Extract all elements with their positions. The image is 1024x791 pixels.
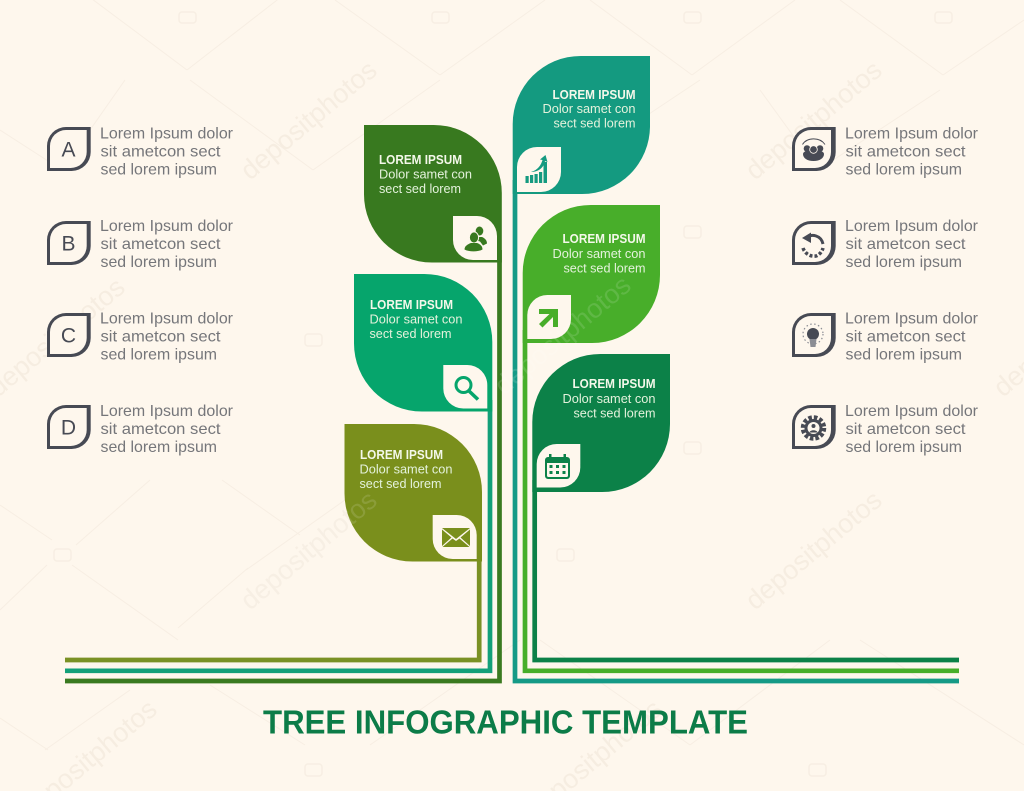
icon: team — [802, 139, 825, 161]
leaf: olive, envelope — [344, 424, 482, 562]
leaf: light green, arrow — [523, 205, 660, 343]
legend item: gear — [792, 403, 979, 456]
legend item A — [47, 125, 234, 178]
legend item: team — [792, 125, 979, 178]
legend item B: Lorem Ipsum dolor — [100, 218, 234, 235]
icon: undo arrow — [802, 232, 823, 256]
legend item: team: sed lorem ipsum — [846, 161, 962, 178]
watermark text: depositphotos — [235, 55, 383, 186]
leaf: dark green, people: sect sed lorem — [379, 182, 461, 196]
legend item: undo: sed lorem ipsum — [846, 254, 962, 271]
legend item B: sit ametcon sect — [100, 236, 221, 253]
leaf: forest green, calendar: sect sed lorem — [574, 406, 656, 420]
leaf: light green, arrow: sect sed lorem — [564, 262, 646, 276]
leaf: olive, envelope: Dolor samet con — [360, 462, 453, 476]
tree stems and ground lines — [65, 180, 959, 681]
leaf: forest green, calendar: Dolor samet con — [562, 392, 656, 406]
title: TREE INFOGRAPHIC TEMPLATE — [263, 704, 748, 742]
legend item D: D — [61, 416, 76, 440]
legend item: undo — [792, 218, 979, 271]
icon: calendar — [545, 454, 570, 479]
legend item: undo: Lorem Ipsum dolor — [845, 218, 979, 235]
leaf: emerald, magnifier: Dolor samet con — [370, 312, 463, 326]
icon: arrow — [539, 309, 558, 328]
legend item D: Lorem Ipsum dolor — [100, 403, 234, 420]
leaf: forest green, calendar: LOREM IPSUM — [572, 376, 656, 391]
icon: growth chart — [526, 155, 548, 183]
watermark text: depositphotos — [235, 485, 383, 616]
legend item: idea: sed lorem ipsum — [846, 346, 962, 363]
icon: people — [464, 226, 487, 251]
legend item C: sed lorem ipsum — [100, 346, 217, 363]
leaf: emerald, magnifier: sect sed lorem — [370, 327, 452, 341]
legend: right column — [792, 125, 979, 456]
leaf: forest green, calendar — [532, 354, 670, 492]
legend item: idea: Lorem Ipsum dolor — [845, 310, 979, 327]
leaf: emerald, magnifier: LOREM IPSUM — [370, 297, 453, 312]
legend item: gear: sit ametcon sect — [846, 421, 966, 438]
legend item: idea — [792, 310, 979, 363]
legend item A: A — [61, 138, 76, 162]
watermark text: depositphotos — [740, 485, 888, 616]
legend item: undo: sit ametcon sect — [846, 236, 966, 253]
leaf: dark green, people — [364, 125, 502, 262]
legend item C: Lorem Ipsum dolor — [100, 310, 234, 327]
leaf: teal, growth chart: LOREM IPSUM — [552, 87, 636, 102]
leaf: light green, arrow: Dolor samet con — [552, 247, 646, 261]
leaf: teal, growth chart: Dolor samet con — [542, 102, 636, 116]
leaf: emerald, magnifier — [354, 274, 492, 412]
legend item B — [47, 218, 234, 271]
legend item A: sit ametcon sect — [100, 144, 221, 160]
legend item B: B — [61, 232, 76, 256]
leaf: dark green, people: LOREM IPSUM — [379, 152, 462, 167]
legend item D: sit ametcon sect — [100, 421, 221, 438]
icon: envelope — [442, 528, 470, 547]
legend item: idea: sit ametcon sect — [846, 328, 966, 346]
legend item: gear: sed lorem ipsum — [846, 439, 962, 456]
watermark over leaves — [235, 270, 637, 616]
watermark text: depositphotos — [740, 55, 888, 186]
legend item B: sed lorem ipsum — [100, 254, 217, 271]
leaf: olive, envelope: sect sed lorem — [360, 477, 442, 491]
legend item D: sed lorem ipsum — [100, 439, 217, 456]
leaf: teal, growth chart — [513, 56, 650, 194]
leaf: dark green, people: Dolor samet con — [379, 168, 472, 182]
legend item A: sed lorem ipsum — [100, 161, 217, 178]
legend item: team: sit ametcon sect — [846, 144, 966, 160]
icon: light bulb — [803, 324, 823, 347]
legend item D — [47, 403, 234, 456]
leaf: light green, arrow: LOREM IPSUM — [562, 231, 646, 246]
watermark over leaves: depositphotos — [489, 270, 637, 401]
legend item C: sit ametcon sect — [100, 328, 221, 346]
leaf: teal, growth chart: sect sed lorem — [554, 116, 636, 130]
legend item C — [47, 310, 234, 363]
icon: magnifier — [456, 378, 478, 400]
legend item C: C — [61, 324, 76, 348]
watermark over leaves: depositphotos — [235, 485, 383, 616]
icon: gear — [803, 418, 824, 438]
leaf: olive, envelope: LOREM IPSUM — [360, 447, 443, 462]
legend item: gear: Lorem Ipsum dolor — [845, 403, 979, 420]
legend: left column — [47, 125, 234, 456]
legend item: team: Lorem Ipsum dolor — [845, 125, 979, 142]
legend item A: Lorem Ipsum dolor — [100, 125, 234, 142]
